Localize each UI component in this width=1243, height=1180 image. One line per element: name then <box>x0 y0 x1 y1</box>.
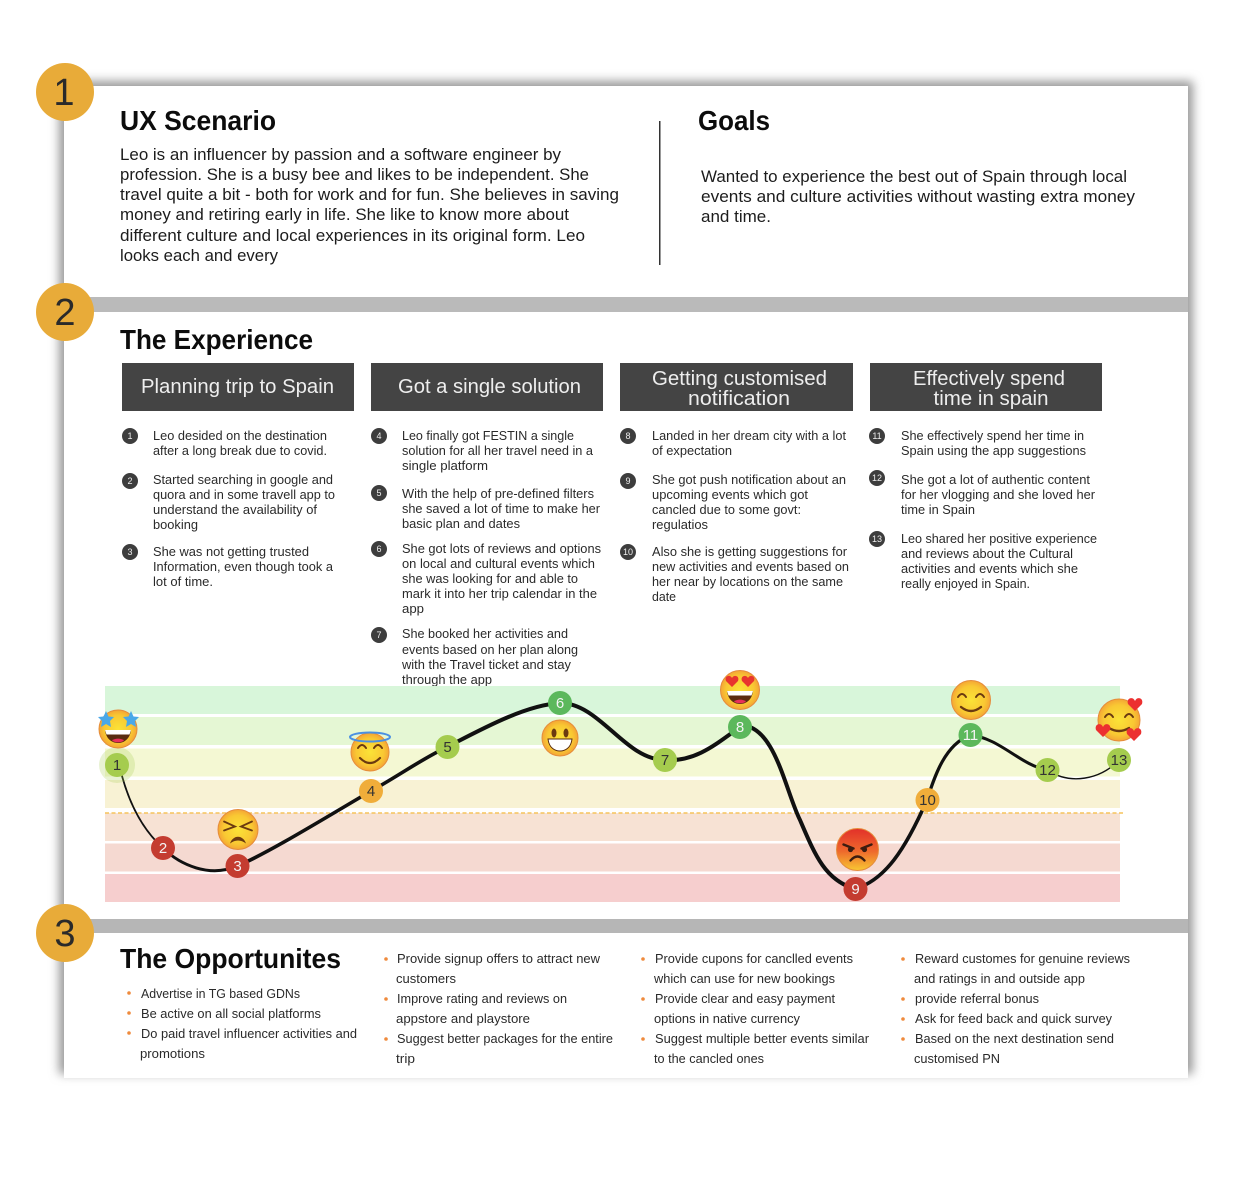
opportunity list 3: options in native currency <box>654 1012 801 1026</box>
step list: column 3: Also she is getting suggestions for <box>652 545 847 559</box>
journey nodes: 13 <box>1111 752 1127 769</box>
opportunity list 1: Advertise in TG based GDNs <box>141 987 300 1001</box>
heading: The Experience: The Experience <box>120 324 313 355</box>
step list: column 1: understand the availability of <box>153 503 318 517</box>
icon: tired emoji <box>218 810 258 850</box>
step list: column 1 <box>122 428 335 589</box>
step list: column 1: lot of time. <box>153 575 213 589</box>
journey nodes: 8 <box>736 719 744 736</box>
step list: column 2: events based on her plan along <box>402 643 578 657</box>
step list: column 2: 6 <box>376 544 382 554</box>
icon: smiling emoji <box>952 680 990 720</box>
opportunity list 1 <box>127 987 357 1061</box>
opportunity list 2: trip <box>396 1052 415 1066</box>
step list: column 4: 11 <box>872 431 882 441</box>
step list: column 2: mark it into her trip calendar in the <box>402 587 597 601</box>
section badge 1 <box>36 63 94 121</box>
step list: column 4: really enjoyed in Spain. <box>901 577 1030 591</box>
step list: column 2: solution for all her travel need in a <box>402 444 593 458</box>
step list: column 4 <box>869 428 1097 591</box>
phase header: planning: Planning trip to Spain <box>141 375 334 398</box>
journey nodes: 4 <box>367 783 375 800</box>
text block: goals: events and culture activities without wasting extra money <box>701 187 1136 206</box>
step list: column 2: She booked her activities and <box>402 627 568 641</box>
step list: column 1: Started searching in google and <box>153 473 333 487</box>
step list: column 1: Information, even though took a <box>153 560 333 574</box>
step list: column 3: her near by locations on the same <box>652 575 843 589</box>
opportunity list 3 <box>641 952 869 1066</box>
step list: column 3: 8 <box>625 431 631 441</box>
step list: column 2: on local and cultural events which <box>402 557 595 571</box>
panel: the experience <box>64 312 1188 919</box>
opportunity list 4 <box>901 952 1130 1066</box>
step list: column 2: 4 <box>376 431 382 441</box>
phase header: spend time: time in spain <box>934 387 1048 410</box>
text block: scenario: looks each and every <box>120 246 278 265</box>
step list: column 2: app <box>402 602 424 616</box>
step list: column 4: 12 <box>872 473 882 483</box>
step list: column 4: and reviews about the Cultural <box>901 547 1073 561</box>
step list: column 3: regulatios <box>652 518 708 532</box>
step list: column 3: of expectation <box>652 444 732 458</box>
section badge 1: 1 <box>53 72 75 114</box>
step list: column 4: activities and events which she <box>901 562 1078 576</box>
step list: column 4: She got a lot of authentic content <box>901 473 1091 487</box>
text block: scenario: Leo is an influencer by passion and a software engineer by <box>120 145 561 164</box>
step list: column 1: She was not getting trusted <box>153 545 309 559</box>
section badge 3 <box>36 904 94 962</box>
step list: column 1: 1 <box>127 431 133 441</box>
opportunity list 3: to the cancled ones <box>654 1052 764 1066</box>
opportunity list 1: promotions <box>140 1047 205 1061</box>
journey nodes: 7 <box>661 752 669 769</box>
text block: goals <box>701 167 1136 226</box>
icon: angry emoji <box>836 828 878 870</box>
text block: goals: Wanted to experience the best out of Spain through local <box>701 167 1127 186</box>
heading: UX Scenario: UX Scenario <box>120 105 276 136</box>
step list: column 4: for her vlogging and she loved her <box>901 488 1095 502</box>
chart: experience journey curve <box>98 670 1142 902</box>
text block: scenario: money and retiring early in life. She like to know more about <box>120 205 569 224</box>
opportunity list 4: Ask for feed back and quick survey <box>915 1012 1113 1026</box>
step list: column 3: date <box>652 590 676 604</box>
journey nodes: 6 <box>556 695 564 712</box>
icon: heart-eyes emoji <box>720 670 760 710</box>
step list: column 2 <box>371 428 601 687</box>
opportunity list 1: Be active on all social platforms <box>141 1007 321 1021</box>
step list: column 2: With the help of pre-defined filters <box>402 487 594 501</box>
step list: column 4: Spain using the app suggestions <box>901 444 1086 458</box>
step list: column 1: booking <box>153 518 198 532</box>
phase header: spend time: Effectively spend <box>913 367 1065 390</box>
journey nodes: 10 <box>919 792 936 809</box>
step list: column 2: she was looking for and able to <box>402 572 578 586</box>
step list: column 3: 9 <box>625 476 631 486</box>
journey nodes: 11 <box>963 727 978 744</box>
phase header: notification: Getting customised <box>652 367 827 390</box>
panel: opportunities <box>64 933 1188 1078</box>
step list: column 3: upcoming events which got <box>652 488 809 502</box>
heading: Goals: Goals <box>698 105 770 136</box>
text block: scenario <box>120 145 619 265</box>
phase header: single solution <box>371 363 603 411</box>
phase header: spend time <box>870 363 1102 411</box>
step list: column 3 <box>620 428 849 604</box>
opportunity list 4: provide referral bonus <box>915 992 1039 1006</box>
phase header: notification <box>620 363 853 411</box>
step list: column 1: after a long break due to covid. <box>153 444 327 458</box>
section badge 3: 3 <box>54 913 76 955</box>
experience curve <box>122 703 1119 889</box>
step list: column 2: with the Travel ticket and stay <box>401 658 572 672</box>
heading: The Opportunites: The Opportunites <box>120 943 341 974</box>
opportunity list 3: Provide cupons for canclled events <box>655 952 853 966</box>
section badge 2 <box>36 283 94 341</box>
step list: column 2: Leo finally got FESTIN a single <box>402 429 574 443</box>
step list: column 2: single platform <box>402 459 488 473</box>
icon: halo smile emoji <box>350 732 390 771</box>
soft shadow: card stack <box>59 81 1193 1074</box>
step list: column 1: quora and in some travell app to <box>153 488 335 502</box>
journey nodes: 12 <box>1039 762 1056 779</box>
phase header: notification: notification <box>688 387 790 410</box>
journey nodes: 1 <box>113 757 121 774</box>
opportunity list 4: and ratings in and outside app <box>914 972 1085 986</box>
opportunity list 4: Reward customes for genuine reviews <box>915 952 1130 966</box>
phase header: single solution: Got a single solution <box>398 375 581 398</box>
journey nodes: 2 <box>159 840 167 857</box>
text block: scenario: travel quite a bit - both for work and for fun. She believes in saving <box>120 185 619 204</box>
step list: column 4: Leo shared her positive experience <box>901 532 1097 546</box>
opportunity list 3: which can use for new bookings <box>653 972 835 986</box>
step list: column 2: she saved a lot of time to make her <box>402 502 600 516</box>
opportunity list 1: Do paid travel influencer activities and <box>141 1027 357 1041</box>
step list: column 3: She got push notification about an <box>652 473 846 487</box>
step list: column 4: time in Spain <box>901 503 975 517</box>
journey nodes: 3 <box>233 858 242 875</box>
text block: goals: and time. <box>701 207 771 226</box>
step list: column 2: through the app <box>402 673 492 687</box>
icon: grinning emoji <box>542 720 578 756</box>
text block: scenario: profession. She is a busy bee and likes to be independent. She <box>120 165 589 184</box>
step list: column 4: 13 <box>872 534 882 544</box>
opportunity list 4: Based on the next destination send <box>915 1032 1114 1046</box>
opportunity list 4: customised PN <box>914 1052 1000 1066</box>
text block: scenario: different culture and local experiences in its original form. Leo <box>120 226 585 245</box>
opportunity list 2: Improve rating and reviews on <box>397 992 567 1006</box>
opportunity list 3: Provide clear and easy payment <box>655 992 835 1006</box>
step list: column 3: Landed in her dream city with a lot <box>652 429 847 443</box>
step list: column 3: 10 <box>623 547 633 557</box>
opportunity list 2 <box>384 952 613 1066</box>
step list: column 4: She effectively spend her time in <box>901 429 1084 443</box>
step list: column 3: cancled due to some govt: <box>652 503 801 517</box>
step list: column 3: new activities and events based on <box>652 560 849 574</box>
panel: UX scenario and goals <box>64 86 1188 297</box>
opportunity list 2: Suggest better packages for the entire <box>397 1032 613 1046</box>
icon: star-struck emoji <box>98 710 139 748</box>
journey nodes <box>99 691 1131 901</box>
journey nodes: 9 <box>851 881 860 898</box>
icon: smiling face with hearts emoji <box>1096 698 1142 741</box>
journey nodes: 5 <box>443 739 452 756</box>
step list: column 1: 3 <box>127 547 133 557</box>
step list: column 1: 2 <box>127 476 133 486</box>
step list: column 2: 7 <box>376 630 382 640</box>
section badge 2: 2 <box>54 292 76 334</box>
step list: column 1: Leo desided on the destination <box>153 429 327 443</box>
opportunity list 2: Provide signup offers to attract new <box>397 952 601 966</box>
phase header: planning <box>122 363 354 411</box>
opportunity list 3: Suggest multiple better events similar <box>655 1032 869 1046</box>
step list: column 2: 5 <box>376 488 382 498</box>
step list: column 2: basic plan and dates <box>402 517 520 531</box>
opportunity list 2: customers <box>396 972 456 986</box>
opportunity list 2: appstore and playstore <box>396 1012 530 1026</box>
sentiment bands <box>105 686 1125 902</box>
step list: column 2: She got lots of reviews and options <box>402 542 601 556</box>
